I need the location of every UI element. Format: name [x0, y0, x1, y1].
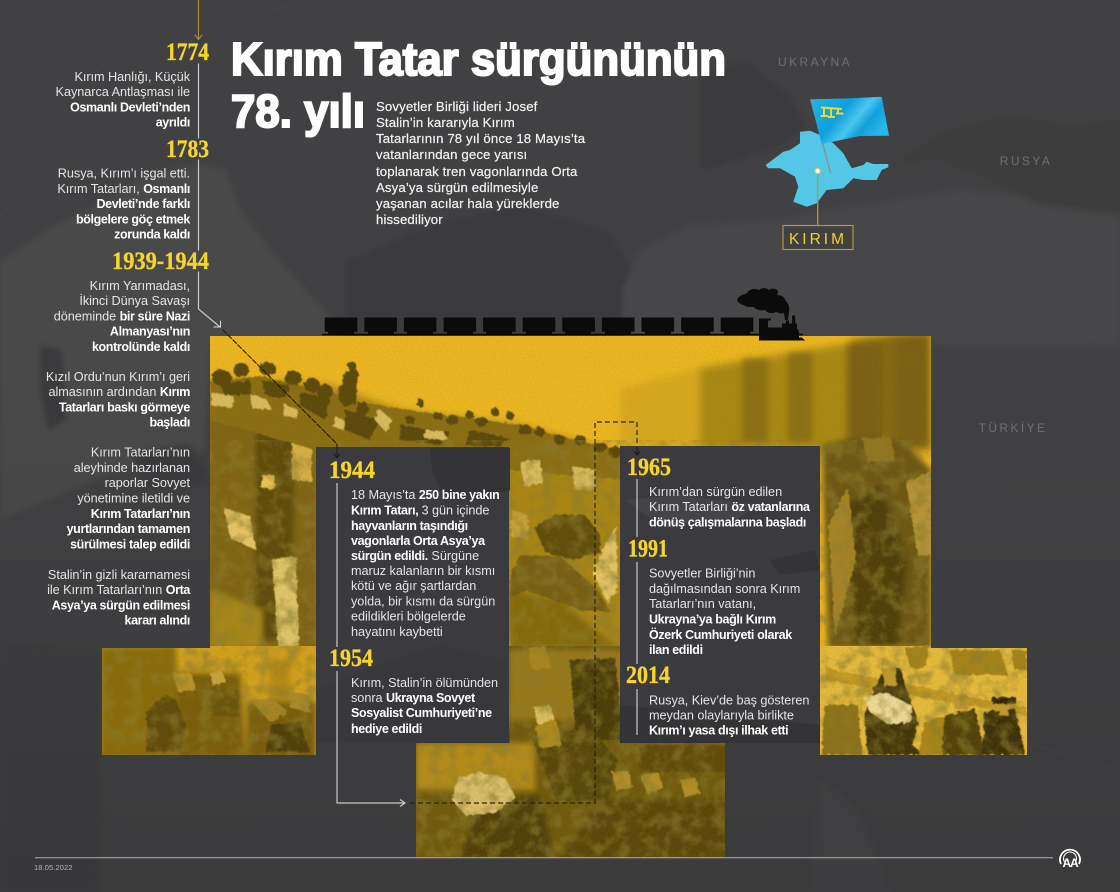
text 1965: dönüş çalışmalarına başladı: [649, 516, 806, 530]
year 2014: 2014: [626, 662, 670, 689]
text 2014: Rusya, Kiev’de baş gösteren: [649, 694, 809, 708]
text: Soviet reports: yurtlarından tamamen: [67, 522, 190, 536]
text: Red Army: almasının ardından Kırım: [48, 385, 190, 399]
text 1944: edildikleri bölgelerde: [351, 610, 466, 624]
text 1991: dağılmasından sonra Kırım: [649, 582, 800, 596]
text 1954: Sosyalist Cumhuriyeti’ne: [351, 706, 492, 720]
flag: [811, 97, 889, 144]
text 1783: zorunda kaldı: [114, 228, 190, 242]
text: Soviet reports: yönetimine iletildi ve: [77, 492, 190, 506]
text 1939-1944: döneminde bir süre Nazi: [54, 310, 190, 324]
text 1783: [57, 166, 190, 242]
intro text: Asya’ya sürgün edilmesiyle: [376, 180, 538, 195]
text: Stalin decree: ile Kırım Tatarları’nın Orta: [47, 583, 191, 597]
text 1991: Ukrayna’ya bağlı Kırım: [649, 612, 776, 626]
vertical rule: [337, 483, 405, 806]
year 1991: 1991: [628, 536, 668, 562]
train silhouette: [322, 288, 805, 340]
text 1783: bölgelere göç etmek: [76, 212, 190, 226]
map: Crimea with flag: [766, 97, 889, 250]
country labels: UKRAYNA: [778, 55, 852, 69]
text 1939-1944: İkinci Dünya Savaşı: [79, 294, 190, 308]
title: [231, 33, 726, 137]
country labels: TÜRKİYE: [979, 421, 1047, 435]
text 2014: meydan olaylarıyla birlikte: [649, 708, 794, 722]
text: Stalin decree: [47, 568, 191, 628]
text 1774: Osmanlı Devleti’nden: [70, 100, 190, 114]
AA logo: [1060, 850, 1080, 870]
text 1954: [351, 676, 498, 736]
text 1944: Kırım Tatarı, 3 gün içinde: [351, 504, 489, 518]
crowd silhouettes on the roof: [210, 362, 625, 492]
intro text: Sovyetler Birliği lideri Josef: [376, 99, 538, 114]
text 1965: Kırım Tatarları öz vatanlarına: [649, 500, 811, 514]
panel: 1965, 1991, 2014: [620, 446, 820, 743]
text 1944: hayatını kaybetti: [351, 625, 443, 639]
text: Soviet reports: Kırım Tatarları’nın: [91, 446, 190, 460]
text: Soviet reports: raporlar Sovyet: [105, 476, 191, 490]
year 1774: 1774: [166, 39, 209, 66]
bottom centre scene: [416, 646, 726, 860]
text: Red Army: Tatarları baskı görmeye: [59, 400, 190, 414]
text: Stalin decree: kararı alındı: [124, 614, 190, 628]
text 1944: sürgün edildi. Sürgüne: [351, 549, 479, 563]
text 1939-1944: Kırım Yarımadası,: [90, 279, 190, 293]
country labels: [778, 55, 1052, 435]
connector arrow into 1944: [334, 444, 340, 458]
year 1783: 1783: [166, 136, 209, 163]
text: Soviet reports: sürülmesi talep edildi: [70, 538, 190, 552]
text 1944: kötü ve ağır şartlardan: [351, 579, 476, 593]
text 2014: [649, 694, 809, 738]
text 1965: [649, 485, 811, 530]
text: Soviet reports: [67, 446, 191, 552]
text 2014: Kırım’ı yasa dışı ilhak etti: [649, 724, 788, 738]
location marker: [815, 168, 820, 174]
AA logo: AA: [1063, 856, 1079, 870]
text 1783: Devleti’nde farklı: [96, 197, 190, 211]
left timeline: [46, 39, 209, 628]
intro text: yaşanan acılar hala yüreklerde: [376, 196, 560, 211]
text: Stalin decree: Stalin’in gizli kararnamesi: [48, 568, 190, 582]
train carriages, right background: [620, 330, 931, 450]
flag pole: [811, 99, 831, 173]
year 1954: 1954: [329, 645, 373, 672]
text: Red Army: Kızıl Ordu’nun Kırım’ı geri: [46, 370, 190, 384]
text 1944: yolda, bir kısmı da sürgün: [351, 594, 495, 608]
text 1954: Kırım, Stalin’in ölümünden: [351, 676, 498, 690]
intro text: vatanlarından gece yarısı: [376, 147, 527, 162]
text: Soviet reports: aleyhinde hazırlanan: [74, 461, 190, 475]
wagon, left: [210, 416, 316, 646]
film grain: [100, 330, 1030, 860]
flag emblem: [820, 107, 844, 117]
text 1991: Tatarları’nın vatanı,: [649, 597, 756, 611]
timeline connector, left: [195, 0, 337, 444]
text 1991: ilan edildi: [649, 643, 703, 657]
wagon and crowd roof, centre left: [210, 378, 640, 640]
text: Stalin decree: Asya’ya sürgün edilmesi: [52, 598, 190, 612]
text 1944: maruz kalanların bir kısmı: [351, 564, 495, 578]
text 1774: Kaynarca Antlaşması ile: [56, 85, 190, 99]
text 1783: Rusya, Kırım’ı işgal etti.: [58, 166, 190, 180]
text: Soviet reports: Kırım Tatarları’nın: [91, 507, 190, 521]
title: Kırım Tatar sürgününün: [231, 33, 726, 85]
text 1783: Kırım Tatarları, Osmanlı: [57, 182, 190, 196]
locomotive: [759, 316, 805, 340]
text 1774: Kırım Hanlığı, Küçük: [74, 70, 191, 84]
text 1774: ayrıldı: [156, 116, 190, 130]
text 1944: hayvanların taşındığı: [351, 519, 468, 533]
text 1944: 18 Mayıs’ta 250 bine yakın: [351, 488, 499, 502]
intro text: toplanarak tren vagonlarında Orta: [376, 164, 578, 179]
text: Red Army: [46, 370, 190, 430]
intro text: [376, 99, 586, 227]
text 1944: [351, 488, 499, 639]
photo collage: deportation scenes: [100, 330, 1030, 860]
intro text: hissediliyor: [376, 212, 443, 227]
date: 18.05.2022: [34, 863, 73, 872]
text 1991: Özerk Cumhuriyeti olarak: [649, 627, 792, 642]
text 1991: Sovyetler Birliği’nin: [649, 566, 755, 580]
leader line: [817, 172, 819, 225]
panel: 1944 and 1954: [316, 444, 510, 806]
text 1954: sonra Ukrayna Sovyet: [351, 691, 476, 705]
smoke: [737, 288, 789, 320]
text 1954: hediye edildi: [351, 722, 422, 736]
text 1991: [649, 566, 800, 657]
text: Red Army: başladı: [149, 416, 190, 430]
right edge woman figure: [822, 436, 931, 648]
text 1939-1944: Almanyası’nın: [110, 324, 190, 338]
country labels: RUSYA: [1000, 154, 1052, 168]
text 1939-1944: [54, 279, 190, 354]
year 1939-1944: 1939-1944: [112, 248, 209, 275]
title: 78. yılı: [231, 85, 365, 137]
text 1965: Kırım’dan sürgün edilen: [649, 485, 782, 499]
connector arrow into 1965: [634, 447, 640, 455]
intro text: Stalin’in kararıyla Kırım: [376, 115, 515, 130]
intro text: Tatarlarının 78 yıl önce 18 Mayıs’ta: [376, 131, 586, 146]
footer: [34, 850, 1080, 872]
label KIRIM: KIRIM: [789, 231, 847, 248]
central strip: man in hat and crowd: [509, 490, 625, 650]
text 1944: vagonlarla Orta Asya’ya: [351, 534, 486, 548]
photo mottling: [100, 440, 1030, 860]
dashed connector between panels: [410, 422, 637, 803]
year 1965: 1965: [627, 454, 671, 481]
text 1774: [56, 70, 191, 130]
Crimea peninsula: [766, 131, 888, 207]
vertical rules: [636, 479, 638, 735]
bottom right scene: [818, 645, 1030, 758]
bottom left scene: [100, 646, 316, 760]
text 1939-1944: kontrolünde kaldı: [92, 340, 190, 354]
year 1944: 1944: [329, 457, 375, 484]
wagons: [325, 318, 753, 332]
label KIRIM: [783, 226, 853, 250]
